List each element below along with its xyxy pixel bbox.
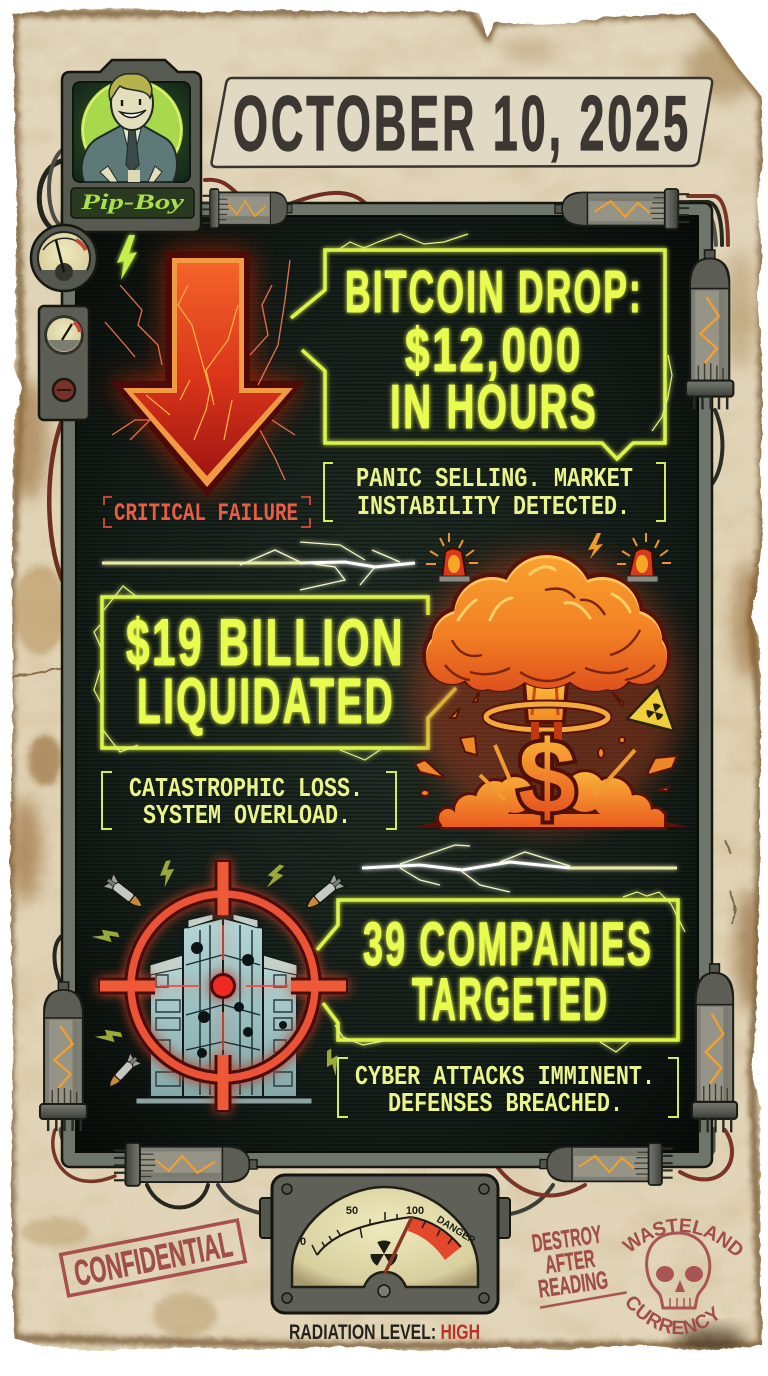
tube: bottom left: [114, 1143, 257, 1186]
confidential stamp: CONFIDENTIAL: [71, 1223, 236, 1294]
mushroom cloud with dollar sign: [412, 550, 688, 836]
Pip-Boy device: [62, 60, 201, 232]
headline: IN HOURS: [390, 373, 598, 442]
scale labels: 100: [406, 1205, 424, 1217]
tube: right upper: [686, 250, 733, 409]
bracketed note 2: [102, 772, 396, 832]
bracketed note 2: CATASTROPHIC LOSS.: [129, 775, 363, 805]
dark screen: [76, 216, 698, 1152]
cables: [39, 150, 732, 1216]
targeted building with crosshair: [91, 860, 348, 1112]
destroy after reading stamp: [529, 1218, 627, 1308]
headline: [126, 605, 405, 737]
siren right: [617, 533, 671, 582]
bracketed note 3: CYBER ATTACKS IMMINENT.: [355, 1063, 655, 1093]
callout: bitcoin drop: [291, 234, 672, 459]
square gauge panel: [39, 306, 89, 420]
screen with Vault Boy: [73, 74, 190, 182]
headline: LIQUIDATED: [137, 665, 395, 737]
siren left: [426, 533, 478, 582]
bracketed note 2: SYSTEM OVERLOAD.: [143, 802, 351, 832]
tube: left lower: [40, 982, 87, 1131]
headline: TARGETED: [412, 966, 609, 1033]
red down arrow: [105, 251, 305, 497]
radiation triangle: [627, 686, 674, 731]
lightning divider 1: [102, 542, 415, 590]
missile 2: [301, 873, 346, 915]
scale labels: [300, 1205, 478, 1248]
label plate: Pip-Boy: [80, 189, 184, 214]
date banner: [212, 78, 712, 167]
bracketed note 3: DEFENSES BREACHED.: [388, 1090, 623, 1120]
wasteland currency stamp: [621, 1218, 742, 1334]
lightning divider 2: [362, 845, 677, 892]
label plate: [71, 188, 194, 218]
destroy after reading stamp: DESTROY: [530, 1220, 604, 1258]
radiation meter: [260, 1175, 510, 1313]
callout: companies: [317, 892, 685, 1052]
tube: bottom right: [540, 1143, 673, 1185]
destroy after reading stamp: AFTER: [543, 1245, 597, 1279]
skull: [647, 1233, 710, 1308]
tube: top right: [555, 189, 689, 229]
tube: top left: [203, 189, 292, 228]
scale labels: 50: [346, 1205, 358, 1217]
headline: $19 BILLION: [126, 605, 405, 679]
panel frame: [62, 203, 712, 1167]
bracketed note 1: PANIC SELLING. MARKET: [356, 465, 633, 495]
bracketed note 1: INSTABILITY DETECTED.: [357, 493, 630, 523]
headline: $12,000: [405, 316, 583, 384]
scale labels: 0: [300, 1236, 306, 1248]
round gauge: [31, 225, 97, 291]
dollar sign: $: [518, 720, 576, 836]
green lightning icon: [117, 235, 137, 280]
tube: right lower: [692, 964, 737, 1132]
bracketed note 1: [324, 463, 665, 523]
callout: liquidated: [94, 586, 456, 760]
wasteland currency stamp: CURRENCY: [626, 1296, 718, 1334]
radiation level caption: RADIATION LEVEL: HIGH: [289, 1321, 480, 1344]
destroy after reading stamp: READING: [537, 1266, 610, 1304]
debris: [415, 692, 677, 796]
missile 1: [103, 873, 147, 914]
bracketed note 3: [338, 1058, 678, 1120]
building: [136, 914, 312, 1104]
crosshair: [98, 860, 348, 1112]
sparks: [91, 860, 346, 1078]
orange bolt: [588, 533, 603, 559]
confidential stamp: [61, 1220, 245, 1296]
scale labels: DANGER: [434, 1214, 478, 1247]
arrow cracks and sparks: [105, 260, 295, 480]
headline: [345, 259, 643, 442]
wasteland currency stamp: WASTELAND: [621, 1218, 742, 1256]
critical failure label: CRITICAL FAILURE: [114, 499, 298, 528]
headline: [363, 910, 653, 1033]
missile 3: [104, 1053, 142, 1092]
